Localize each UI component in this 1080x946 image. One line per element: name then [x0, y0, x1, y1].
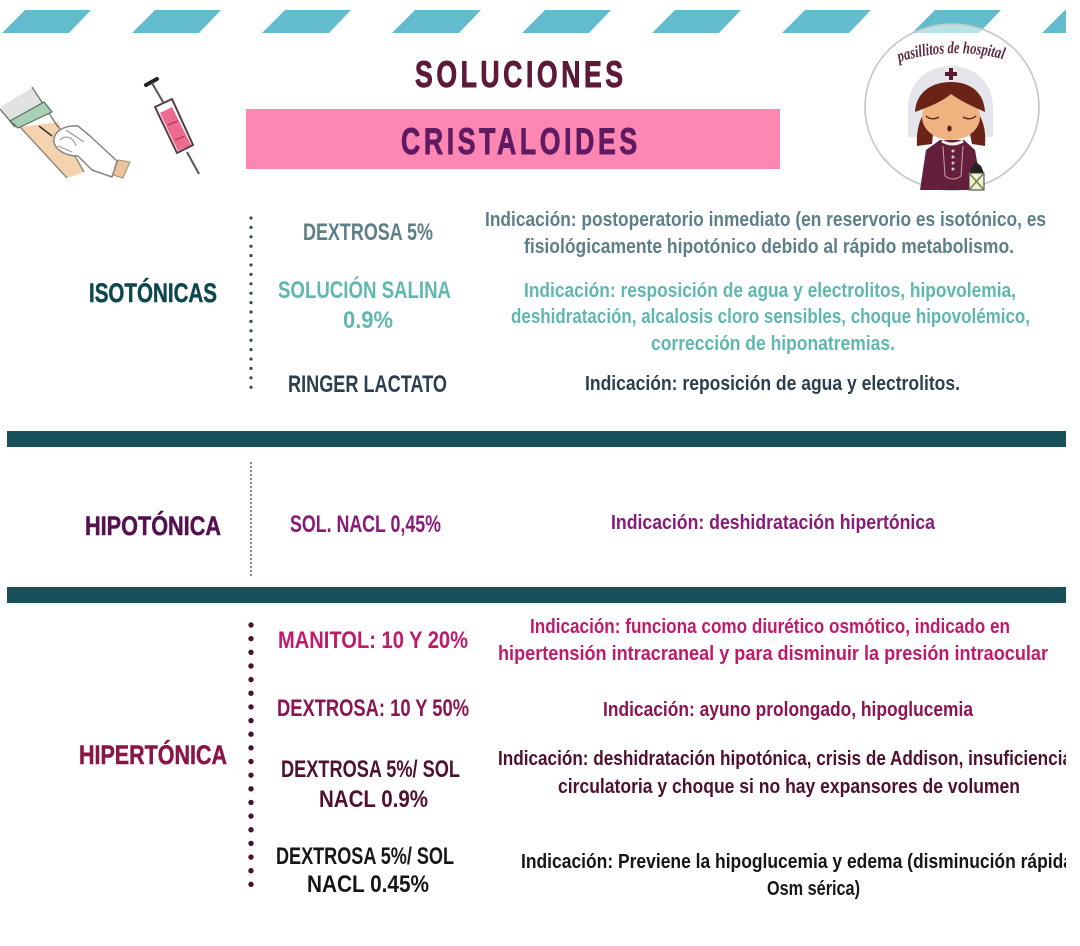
icon: arm receiving an injection	[0, 87, 130, 178]
row: solución salina 0.9%: 0.9%	[343, 307, 393, 334]
dotted divider: isotónicas	[249, 218, 253, 396]
row: sol. nacl 0,45%: SOL. NACL 0,45%	[290, 511, 441, 538]
row: dextrosa 5% / sol nacl 0.45%: Osm sérica)	[767, 878, 860, 900]
row: dextrosa 5% / sol nacl 0.9%: NACL 0.9%	[319, 786, 428, 813]
row: dextrosa 5%: fisiológicamente hipotónico debido al rápido metabolismo.	[524, 236, 1014, 258]
panel: hipotónica	[85, 463, 936, 578]
section bar	[7, 587, 1066, 603]
icon: nurse logo badge: pasillitos de hospital	[897, 41, 1006, 66]
row: solución salina 0.9%	[278, 276, 1030, 355]
row: dextrosa 5% / sol nacl 0.45%	[276, 843, 1074, 900]
heading: hipotónica: HIPOTÓNICA	[85, 510, 221, 541]
icon: nurse logo badge	[864, 23, 1040, 191]
row: manitol: MANITOL: 10 Y 20%	[278, 627, 468, 654]
row: dextrosa 10 y 50%: Indicación: ayuno prolongado, hipoglucemia	[603, 699, 974, 721]
row: dextrosa 10 y 50%	[278, 699, 974, 720]
row: dextrosa 5% / sol nacl 0.45%: DEXTROSA 5%/ SOL	[276, 843, 454, 870]
row: ringer lactato: Indicación: reposición de agua y electrolitos.	[585, 373, 960, 395]
icon: syringe	[146, 79, 199, 174]
dotted divider: hipotónica	[250, 463, 252, 578]
panel: isotónicas	[89, 209, 1046, 398]
row: dextrosa 10 y 50%: DEXTROSA: 10 Y 50%	[277, 695, 469, 722]
row: sol. nacl 0,45%: Indicación: deshidratación hipertónica	[611, 512, 936, 534]
row: solución salina 0.9%: Indicación: resposición de agua y electrolitos, hipovolemia,	[524, 280, 1016, 302]
row: ringer lactato: RINGER LACTATO	[288, 371, 447, 398]
heading: isotónicas: ISOTÓNICAS	[89, 277, 217, 308]
row: dextrosa 5%: DEXTROSA 5%	[303, 219, 433, 246]
row: dextrosa 5% / sol nacl 0.9%: circulatoria y choque si no hay expansores de volumen	[558, 776, 1020, 798]
row: manitol: Indicación: funciona como diurético osmótico, indicado en	[530, 616, 1010, 638]
row: sol. nacl 0,45%	[290, 511, 936, 538]
dotted divider: hipertónica	[248, 625, 254, 898]
row: ringer lactato	[288, 371, 960, 398]
row: dextrosa 5% / sol nacl 0.45%: NACL 0.45%	[307, 871, 429, 898]
row: solución salina 0.9%: SOLUCIÓN SALINA	[278, 276, 451, 304]
striped top border	[2, 10, 1080, 33]
section bar	[7, 431, 1066, 447]
subtitle banner	[246, 109, 780, 169]
panel: hipertónica	[79, 616, 1074, 900]
title: SOLUCIONES	[415, 54, 623, 95]
subtitle banner: CRISTALOIDES	[401, 121, 637, 162]
row: dextrosa 5% / sol nacl 0.9%	[282, 750, 1066, 807]
row: manitol	[278, 616, 1048, 665]
row: solución salina 0.9%: corrección de hiponatremias.	[651, 333, 895, 355]
heading: hipertónica: HIPERTÓNICA	[79, 739, 227, 770]
row: dextrosa 5%	[303, 209, 1046, 258]
row: dextrosa 5% / sol nacl 0.9%: DEXTROSA 5%/ SOL	[281, 756, 460, 783]
